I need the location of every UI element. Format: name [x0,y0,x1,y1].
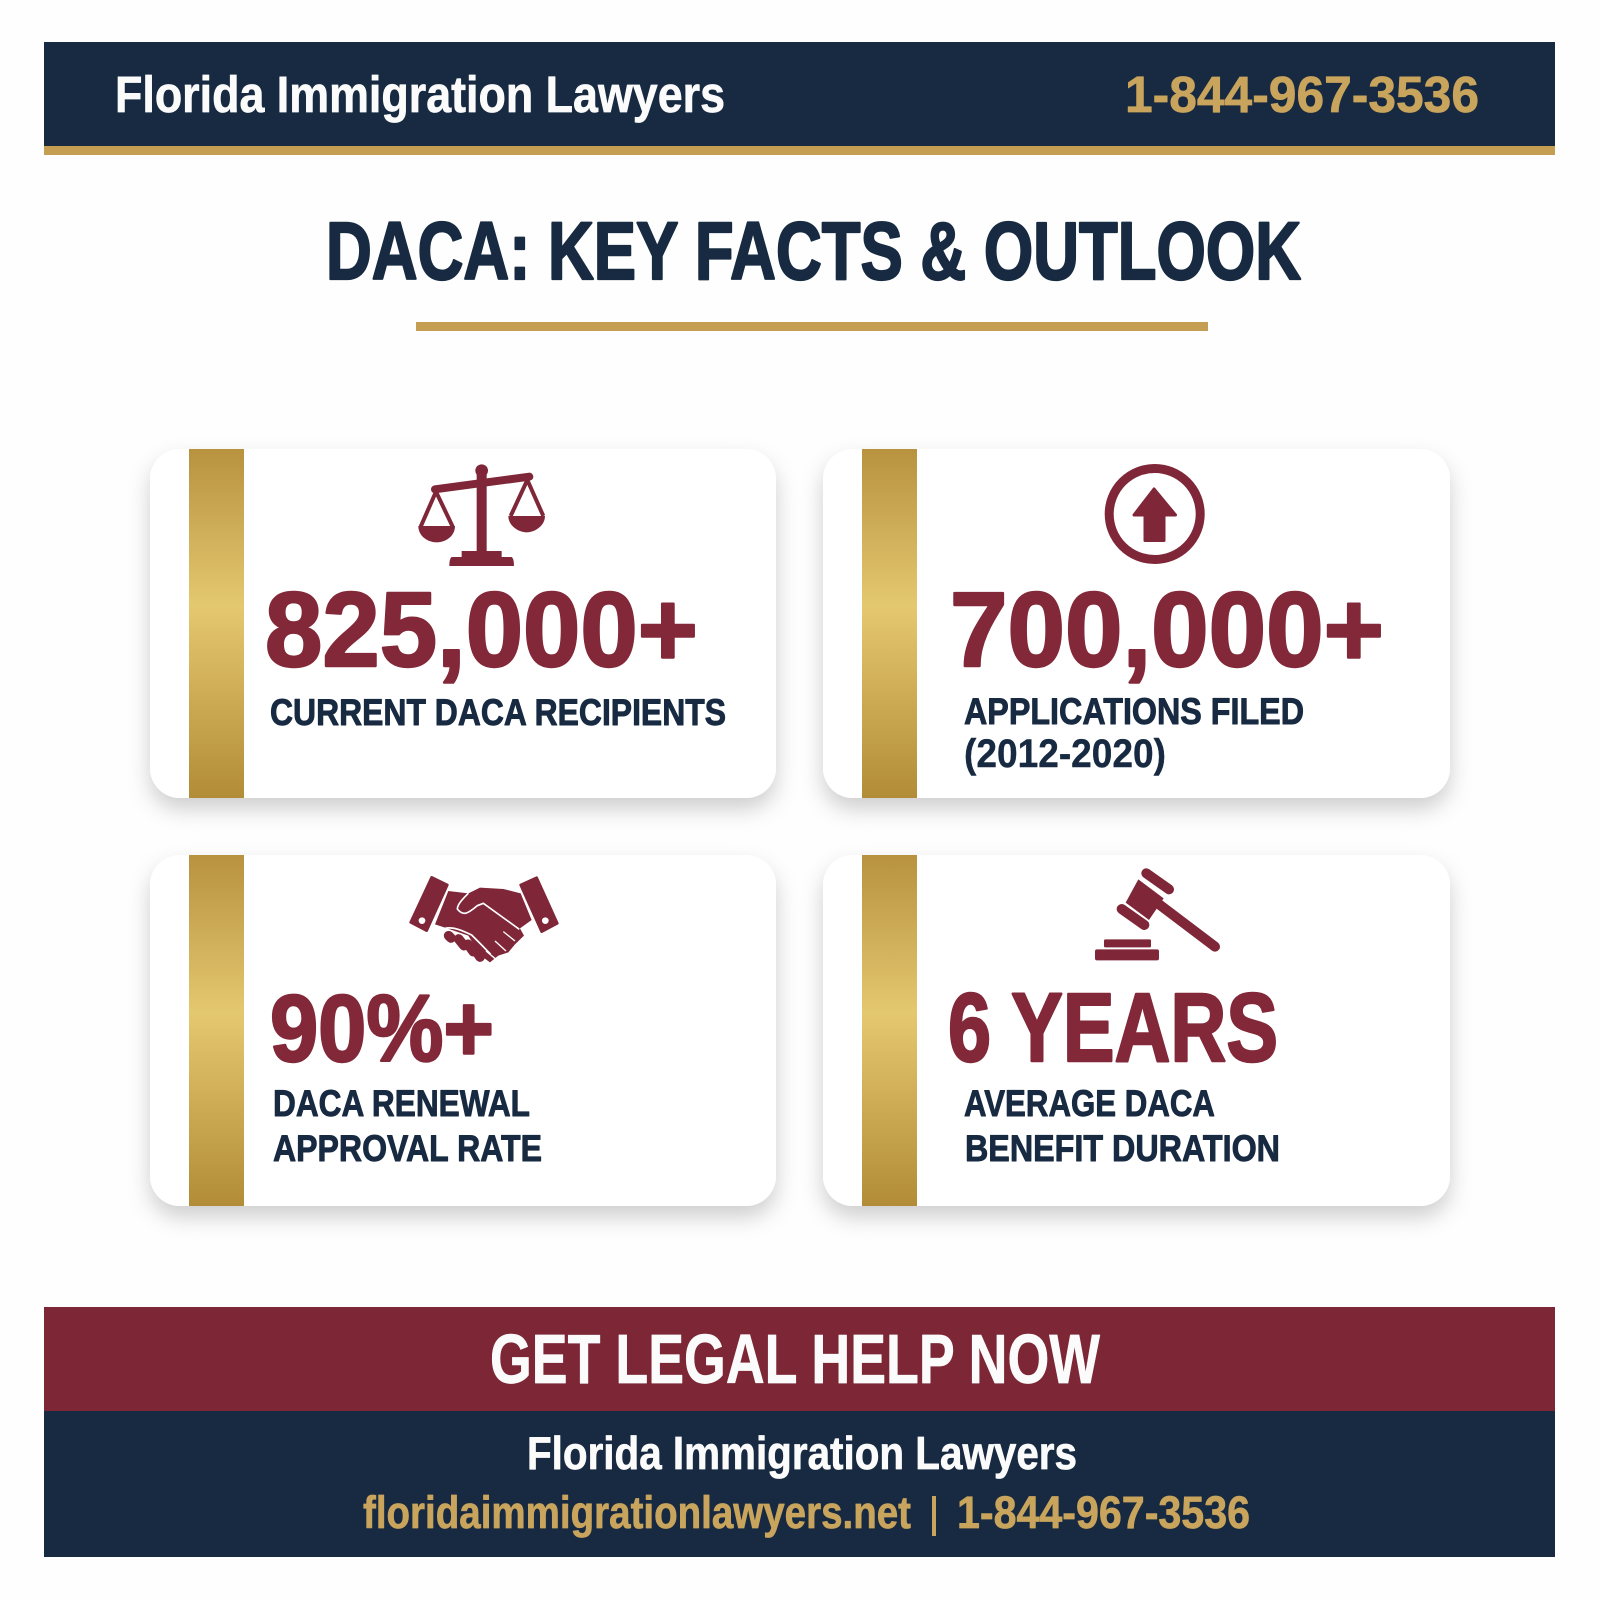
icon: scales of justice [418,464,545,566]
stat: 825,000+: 825,000+ [265,571,698,689]
icon: handshake [411,877,557,962]
label: applications filed: APPLICATIONS FILED [964,691,1304,732]
call to action banner [44,1307,1555,1411]
label: current DACA recipients: CURRENT DACA RECIPIENTS [270,692,726,733]
stat: 700,000+: 700,000+ [950,571,1384,689]
header phone number: 1-844-967-3536 [1125,66,1479,123]
label: year range: (2012-2020) [964,732,1166,776]
footer phone number: 1-844-967-3536 [957,1487,1250,1538]
footer bar [44,1411,1555,1557]
icon: up arrow in circle [1109,468,1200,560]
header bar [44,42,1555,155]
panel: benefit duration [823,855,1450,1206]
footer website: floridaimmigrationlawyers.net [363,1487,911,1538]
footer firm name: Florida Immigration Lawyers [527,1427,1077,1479]
footer divider [932,1496,936,1536]
title: DACA: KEY FACTS & OUTLOOK [326,206,1301,297]
call to action text: GET LEGAL HELP NOW [490,1320,1100,1398]
panel: applications filed [823,449,1450,798]
panel: current DACA recipients [150,449,776,798]
label: average DACA: AVERAGE DACA [964,1083,1215,1124]
icon: gavel [1095,873,1215,960]
stat: 6 years: 6 YEARS [948,973,1278,1082]
label: DACA renewal: DACA RENEWAL [273,1083,530,1124]
stat: 90%+: 90%+ [270,976,494,1082]
panel: renewal approval rate [150,855,776,1206]
label: approval rate: APPROVAL RATE [273,1128,542,1169]
title underline [416,322,1208,331]
label: benefit duration: BENEFIT DURATION [965,1128,1280,1169]
header firm name: Florida Immigration Lawyers [115,66,725,123]
